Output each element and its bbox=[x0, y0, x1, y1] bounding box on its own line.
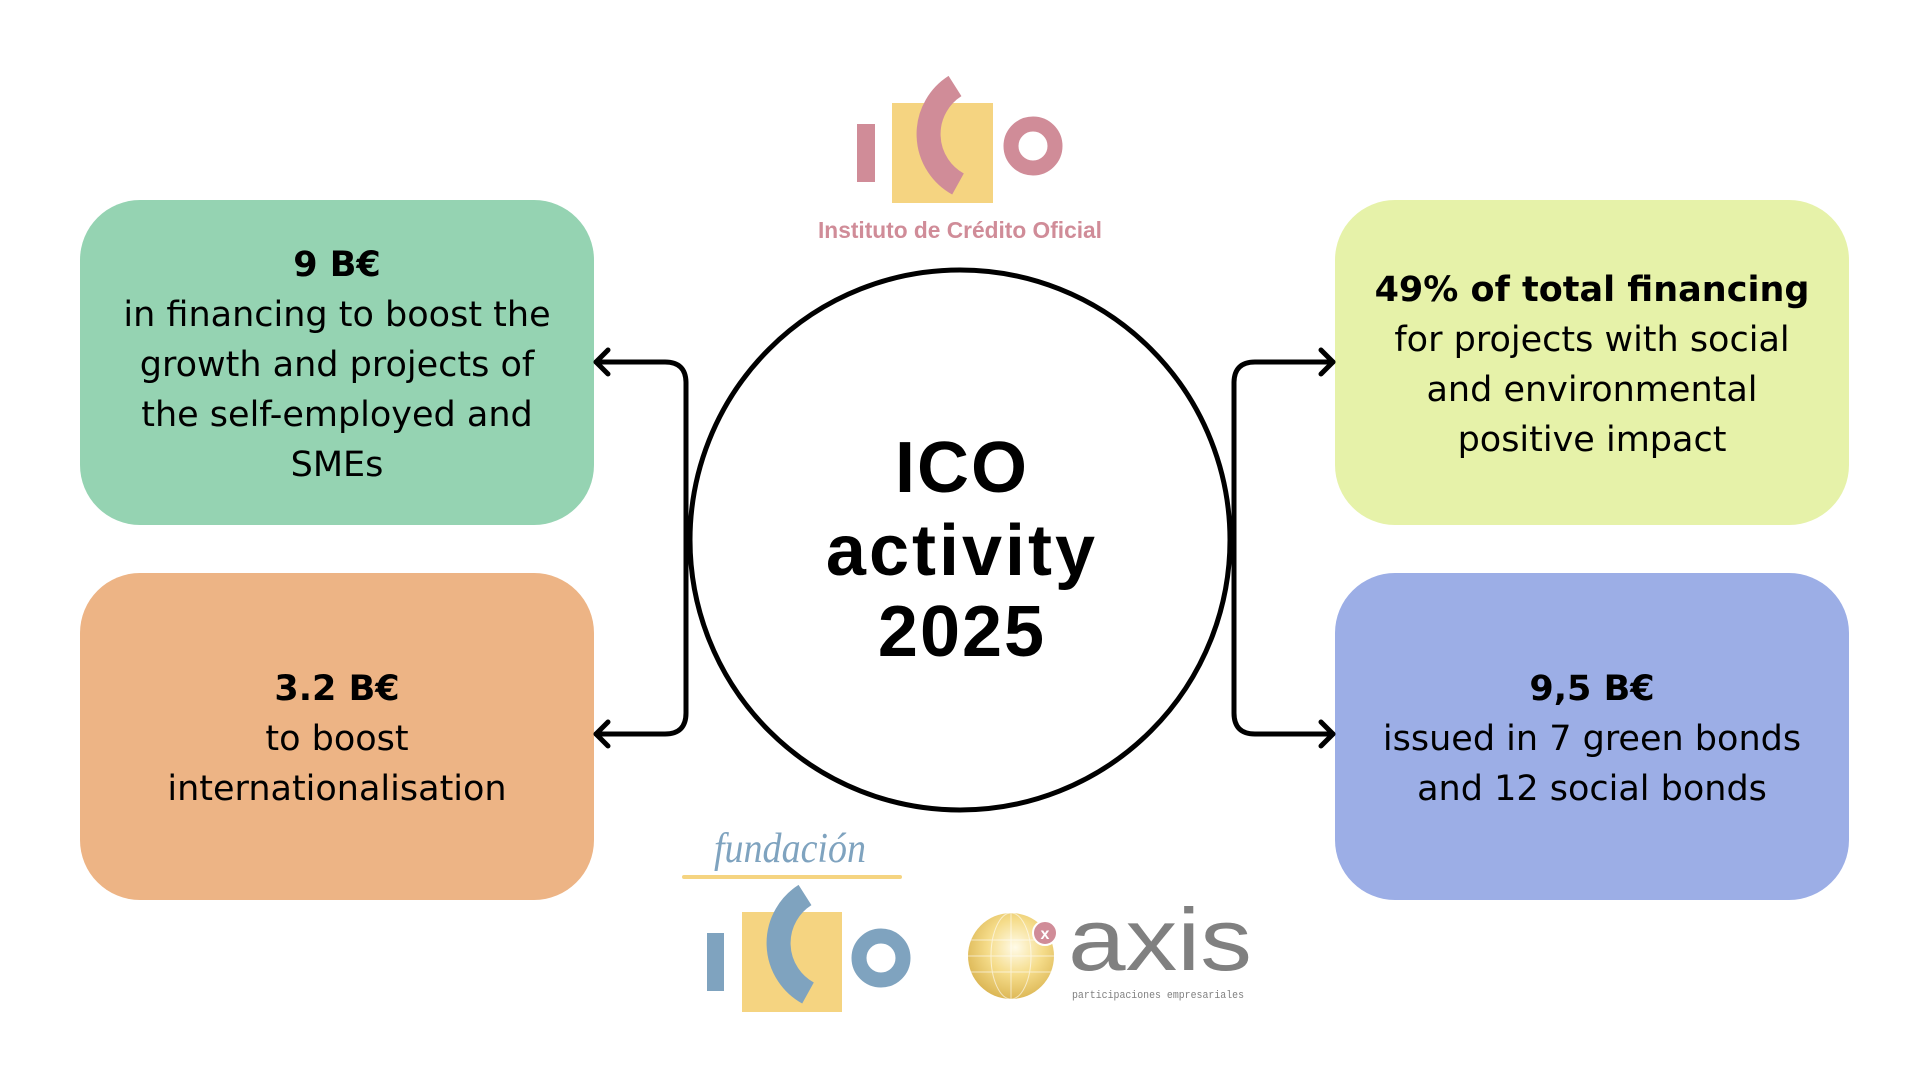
logo: fundación ICO bbox=[682, 826, 903, 1012]
panel: 9,5 B€ bonds: and 12 social bonds bbox=[1417, 769, 1767, 809]
panel: 49% of total financing: 49% of total financing bbox=[1375, 270, 1809, 310]
logo: axis participaciones empresariales: axis bbox=[1068, 890, 1252, 989]
panel: 9 B€ financing: growth and projects of bbox=[140, 345, 535, 385]
panel: 9,5 B€ bonds: issued in 7 green bonds bbox=[1383, 719, 1801, 759]
panel: 9,5 B€ bonds: 9,5 B€ bbox=[1529, 669, 1655, 709]
logo: axis participaciones empresariales bbox=[968, 890, 1252, 1002]
logo: axis participaciones empresariales: x bbox=[1041, 926, 1050, 943]
panel: 3.2 B€ internationalisation: to boost bbox=[265, 719, 409, 759]
panel: 49% of total financing: for projects with social bbox=[1394, 320, 1790, 360]
panel: 49% of total financing bbox=[1335, 200, 1849, 525]
panel: 9,5 B€ bonds bbox=[1335, 573, 1849, 900]
panel: 49% of total financing: positive impact bbox=[1458, 420, 1726, 460]
logo: ICO Instituto de Crédito Oficial: Instituto de Crédito Oficial bbox=[818, 217, 1102, 243]
logo: ICO Instituto de Crédito Oficial bbox=[818, 86, 1102, 243]
panel: 9 B€ financing: SMEs bbox=[291, 445, 383, 485]
panel: 3.2 B€ internationalisation bbox=[80, 573, 594, 900]
panel: 3.2 B€ internationalisation: internationalisation bbox=[167, 769, 507, 809]
central circle with title: ICO bbox=[895, 428, 1029, 508]
panel: 9 B€ financing: the self-employed and bbox=[141, 395, 533, 435]
panel: 9 B€ financing bbox=[80, 200, 594, 525]
arrow: right connectors bbox=[1234, 350, 1333, 746]
logo: fundación ICO: fundación bbox=[714, 826, 866, 872]
central circle with title: activity bbox=[826, 511, 1098, 591]
central circle with title: 2025 bbox=[878, 592, 1046, 672]
panel: 9 B€ financing: in financing to boost the bbox=[123, 295, 551, 335]
central circle with title bbox=[690, 270, 1230, 810]
logo: axis participaciones empresariales: participaciones empresariales bbox=[1072, 990, 1244, 1002]
panel: 3.2 B€ internationalisation: 3.2 B€ bbox=[274, 669, 400, 709]
arrow: left connectors bbox=[596, 350, 686, 746]
panel: 9 B€ financing: 9 B€ bbox=[293, 245, 381, 285]
panel: 49% of total financing: and environmental bbox=[1426, 370, 1758, 410]
